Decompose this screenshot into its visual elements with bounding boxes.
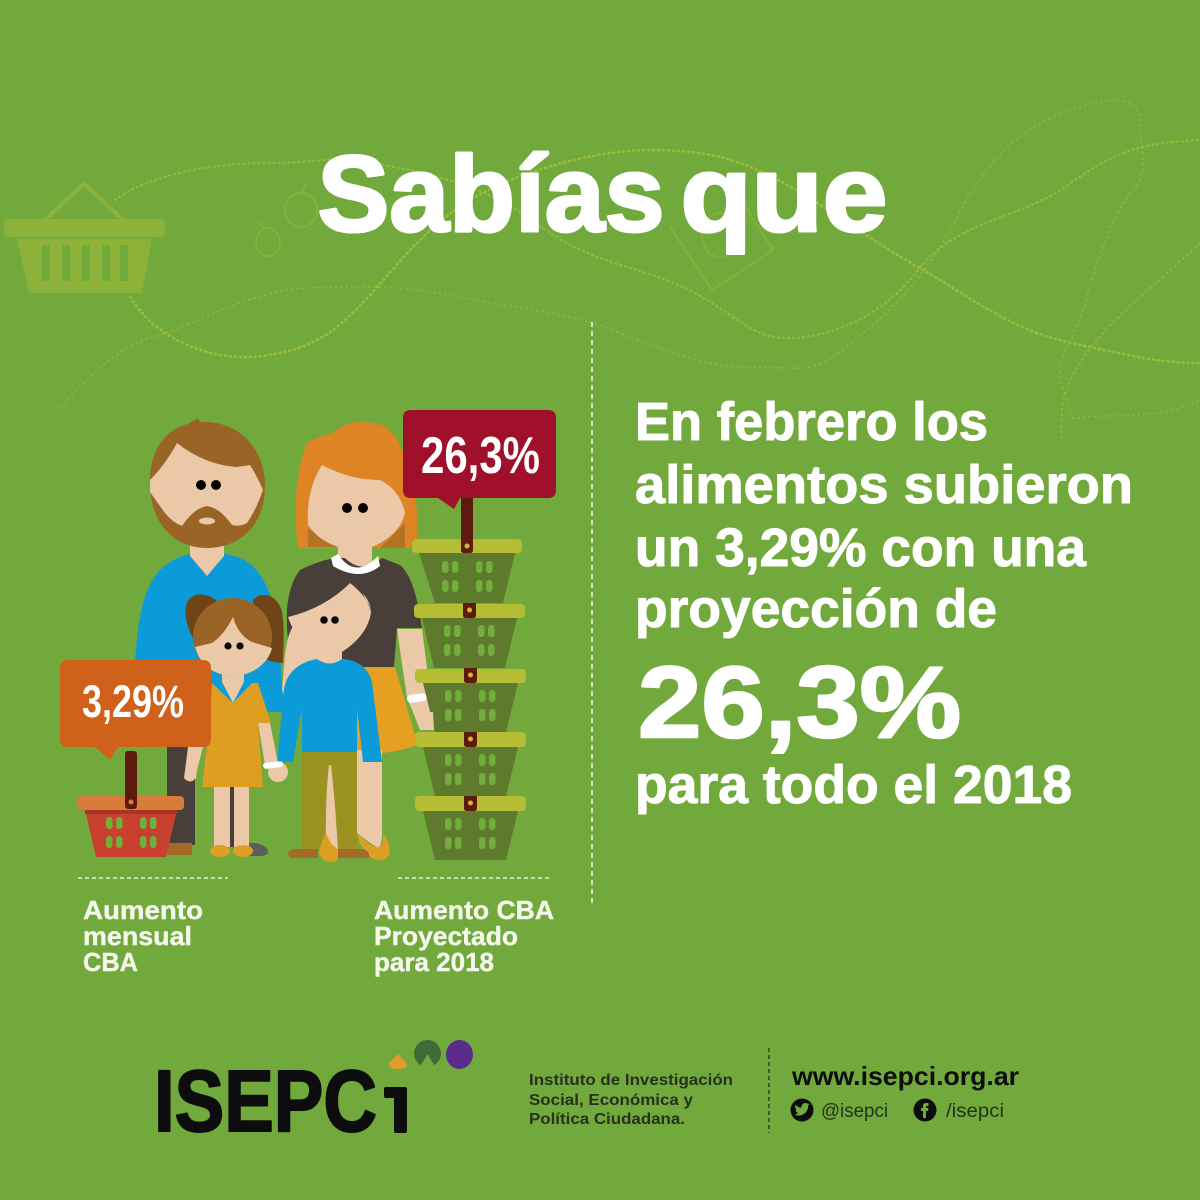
facebook handle: /isepci	[946, 1101, 1004, 1122]
label: monthly increase	[83, 895, 203, 977]
stacked baskets: projected increase	[412, 496, 526, 860]
label: projected increase: para 2018	[374, 947, 494, 977]
title: Sabías	[318, 133, 664, 254]
pole	[461, 496, 473, 546]
main statement text	[635, 392, 1133, 815]
illustration: mother	[282, 422, 434, 860]
website: www.isepci.org.ar	[791, 1061, 1019, 1091]
icon: facebook	[914, 1098, 936, 1122]
label: monthly increase: CBA	[83, 947, 138, 977]
red basket: monthly increase	[77, 751, 184, 857]
callout: monthly 3,29%: 3,29%	[82, 676, 184, 727]
institute name: Política Ciudadana.	[529, 1111, 685, 1128]
background icon: shopping basket	[4, 184, 165, 293]
label: projected increase: Proyectado	[374, 921, 518, 951]
twitter handle: @isepci	[821, 1101, 888, 1122]
main statement text: En febrero los	[635, 392, 988, 452]
main statement text: para todo el 2018	[635, 755, 1072, 815]
basket 4	[415, 732, 526, 796]
institute name	[529, 1072, 733, 1128]
basket 1	[412, 539, 522, 603]
callout: projected 26,3%	[403, 410, 556, 509]
highlighted percentage: 26,3%	[638, 647, 961, 759]
divider	[591, 322, 593, 906]
illustration: girl	[184, 595, 288, 857]
basket 5	[415, 796, 526, 860]
basket 3	[415, 669, 526, 732]
main statement text: proyección de	[635, 579, 997, 639]
dashed rule right	[398, 877, 550, 879]
institute name: Social, Económica y	[529, 1092, 693, 1109]
illustration: boy	[277, 568, 382, 862]
title	[318, 133, 888, 254]
mother's hand	[413, 712, 434, 730]
institute name: Instituto de Investigación	[529, 1072, 733, 1089]
background icons: apples and price tag	[256, 182, 773, 290]
main statement text: alimentos subieron	[635, 455, 1133, 515]
title: que	[680, 133, 888, 254]
basket 2	[414, 604, 525, 668]
dashed rule left	[78, 877, 228, 879]
logo: ISEPCi: ISEPC	[154, 1053, 377, 1150]
label: monthly increase: Aumento	[83, 895, 203, 925]
callout: monthly 3,29%	[60, 660, 211, 760]
callout: projected 26,3%: 26,3%	[421, 427, 540, 485]
icon: twitter	[790, 1098, 814, 1122]
mother's front shoe	[319, 833, 338, 862]
label: projected increase: Aumento CBA	[374, 895, 554, 925]
illustration: father	[135, 418, 284, 856]
main statement text: un 3,29% con una	[635, 518, 1087, 578]
label: projected increase	[374, 895, 554, 977]
label: monthly increase: mensual	[83, 921, 192, 951]
